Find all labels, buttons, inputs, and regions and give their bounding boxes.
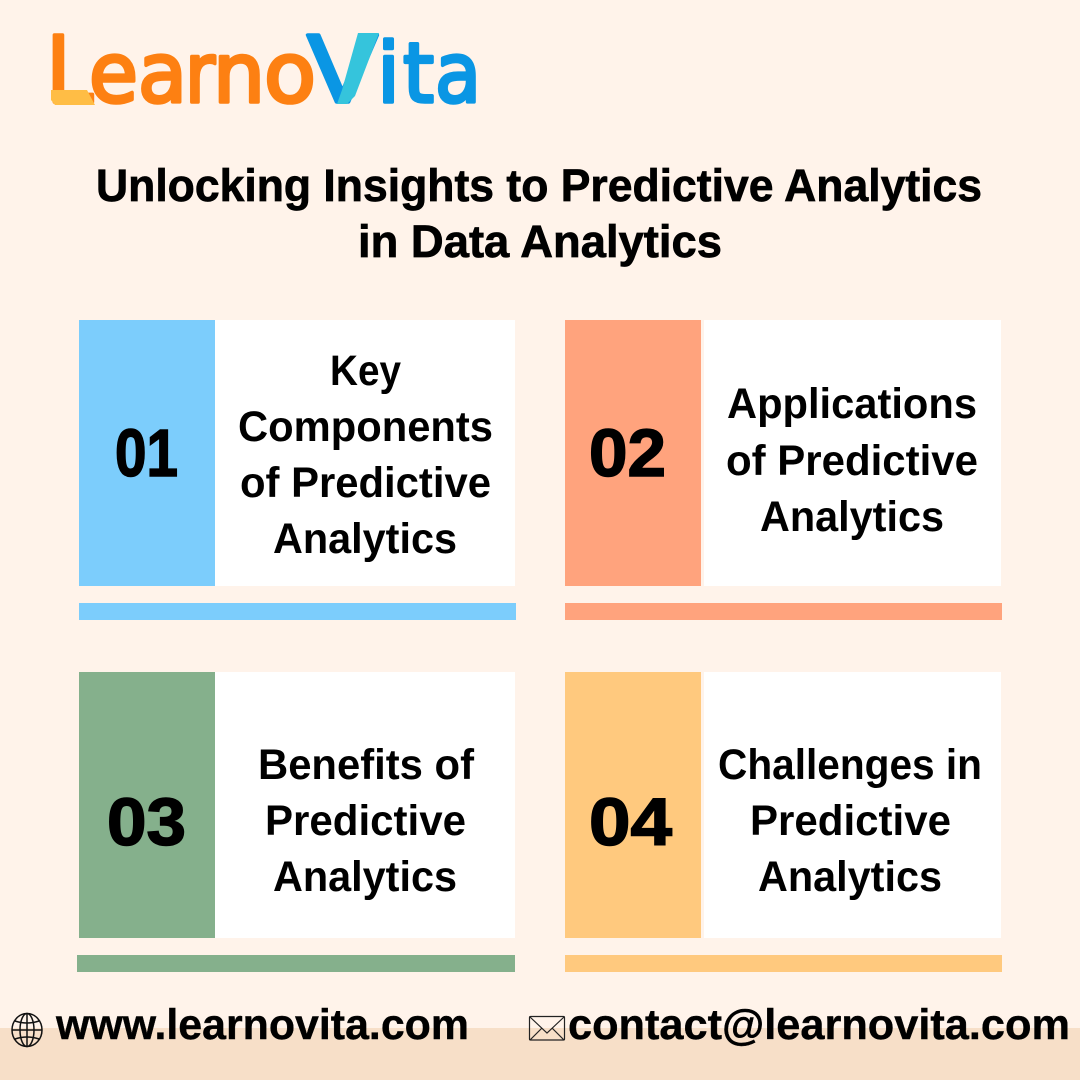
website: www.learnovita.com [55, 1001, 469, 1049]
number block 02 [565, 320, 701, 586]
card text 04: Challenges in [718, 741, 982, 789]
card text 02: Analytics [760, 493, 944, 541]
icon: envelope [530, 1016, 564, 1040]
number 04: 04 [589, 785, 672, 860]
card text 02 [726, 380, 978, 541]
card text 01: Components [238, 403, 493, 451]
card text 03 [258, 741, 475, 901]
number block 01 [79, 320, 215, 586]
accent bar 04 [565, 955, 1002, 972]
accent bar 02 [565, 603, 1002, 620]
card text 02: of Predictive [726, 437, 978, 485]
logo: LearnoVita: L [46, 17, 93, 124]
panel: 02 Applications of Predictive Analytics [565, 320, 1002, 620]
logo: LearnoVita: o [264, 25, 316, 122]
card text 03: Analytics [273, 853, 457, 901]
card text 04: Predictive [750, 797, 951, 845]
accent bar 01 [79, 603, 516, 620]
title: Unlocking Insights to Predictive Analytics [96, 160, 982, 211]
logo: LearnoVita: t [403, 25, 434, 122]
accent bar 03 [77, 955, 515, 972]
card text 03: Predictive [265, 797, 466, 845]
number block 03 [79, 672, 215, 938]
icon: globe [12, 1014, 42, 1046]
title [96, 160, 982, 267]
logo: LearnoVita: n [213, 25, 265, 122]
card text 01 [238, 347, 493, 563]
card text 01: Analytics [273, 515, 457, 563]
card text 01: Key [330, 347, 401, 395]
card text 03: Benefits of [258, 741, 475, 789]
number 03: 03 [107, 785, 186, 860]
card text 04 [718, 741, 982, 901]
card text 02: Applications [727, 380, 977, 428]
logo: LearnoVita: r [185, 25, 216, 122]
number block 04 [565, 672, 701, 938]
number 01: 01 [115, 416, 178, 491]
email: contact@learnovita.com [568, 1001, 1070, 1049]
card text 04: Analytics [758, 853, 942, 901]
number 02: 02 [589, 416, 666, 491]
logo: LearnoVita: a [435, 25, 481, 122]
panel: 01 Key Components of Predictive Analytics [79, 320, 516, 620]
logo: LearnoVita: V [307, 17, 378, 124]
panel: 04 Challenges in Predictive Analytics [565, 672, 1002, 972]
logo: LearnoVita: i [377, 25, 400, 122]
logo: LearnoVita [46, 17, 481, 124]
panel: 03 Benefits of Predictive Analytics [77, 672, 515, 972]
logo: LearnoVita: e [89, 25, 138, 122]
title: in Data Analytics [358, 216, 722, 267]
footer band [0, 1028, 1080, 1080]
card text 01: of Predictive [240, 459, 491, 507]
logo: LearnoVita: a [138, 25, 187, 122]
